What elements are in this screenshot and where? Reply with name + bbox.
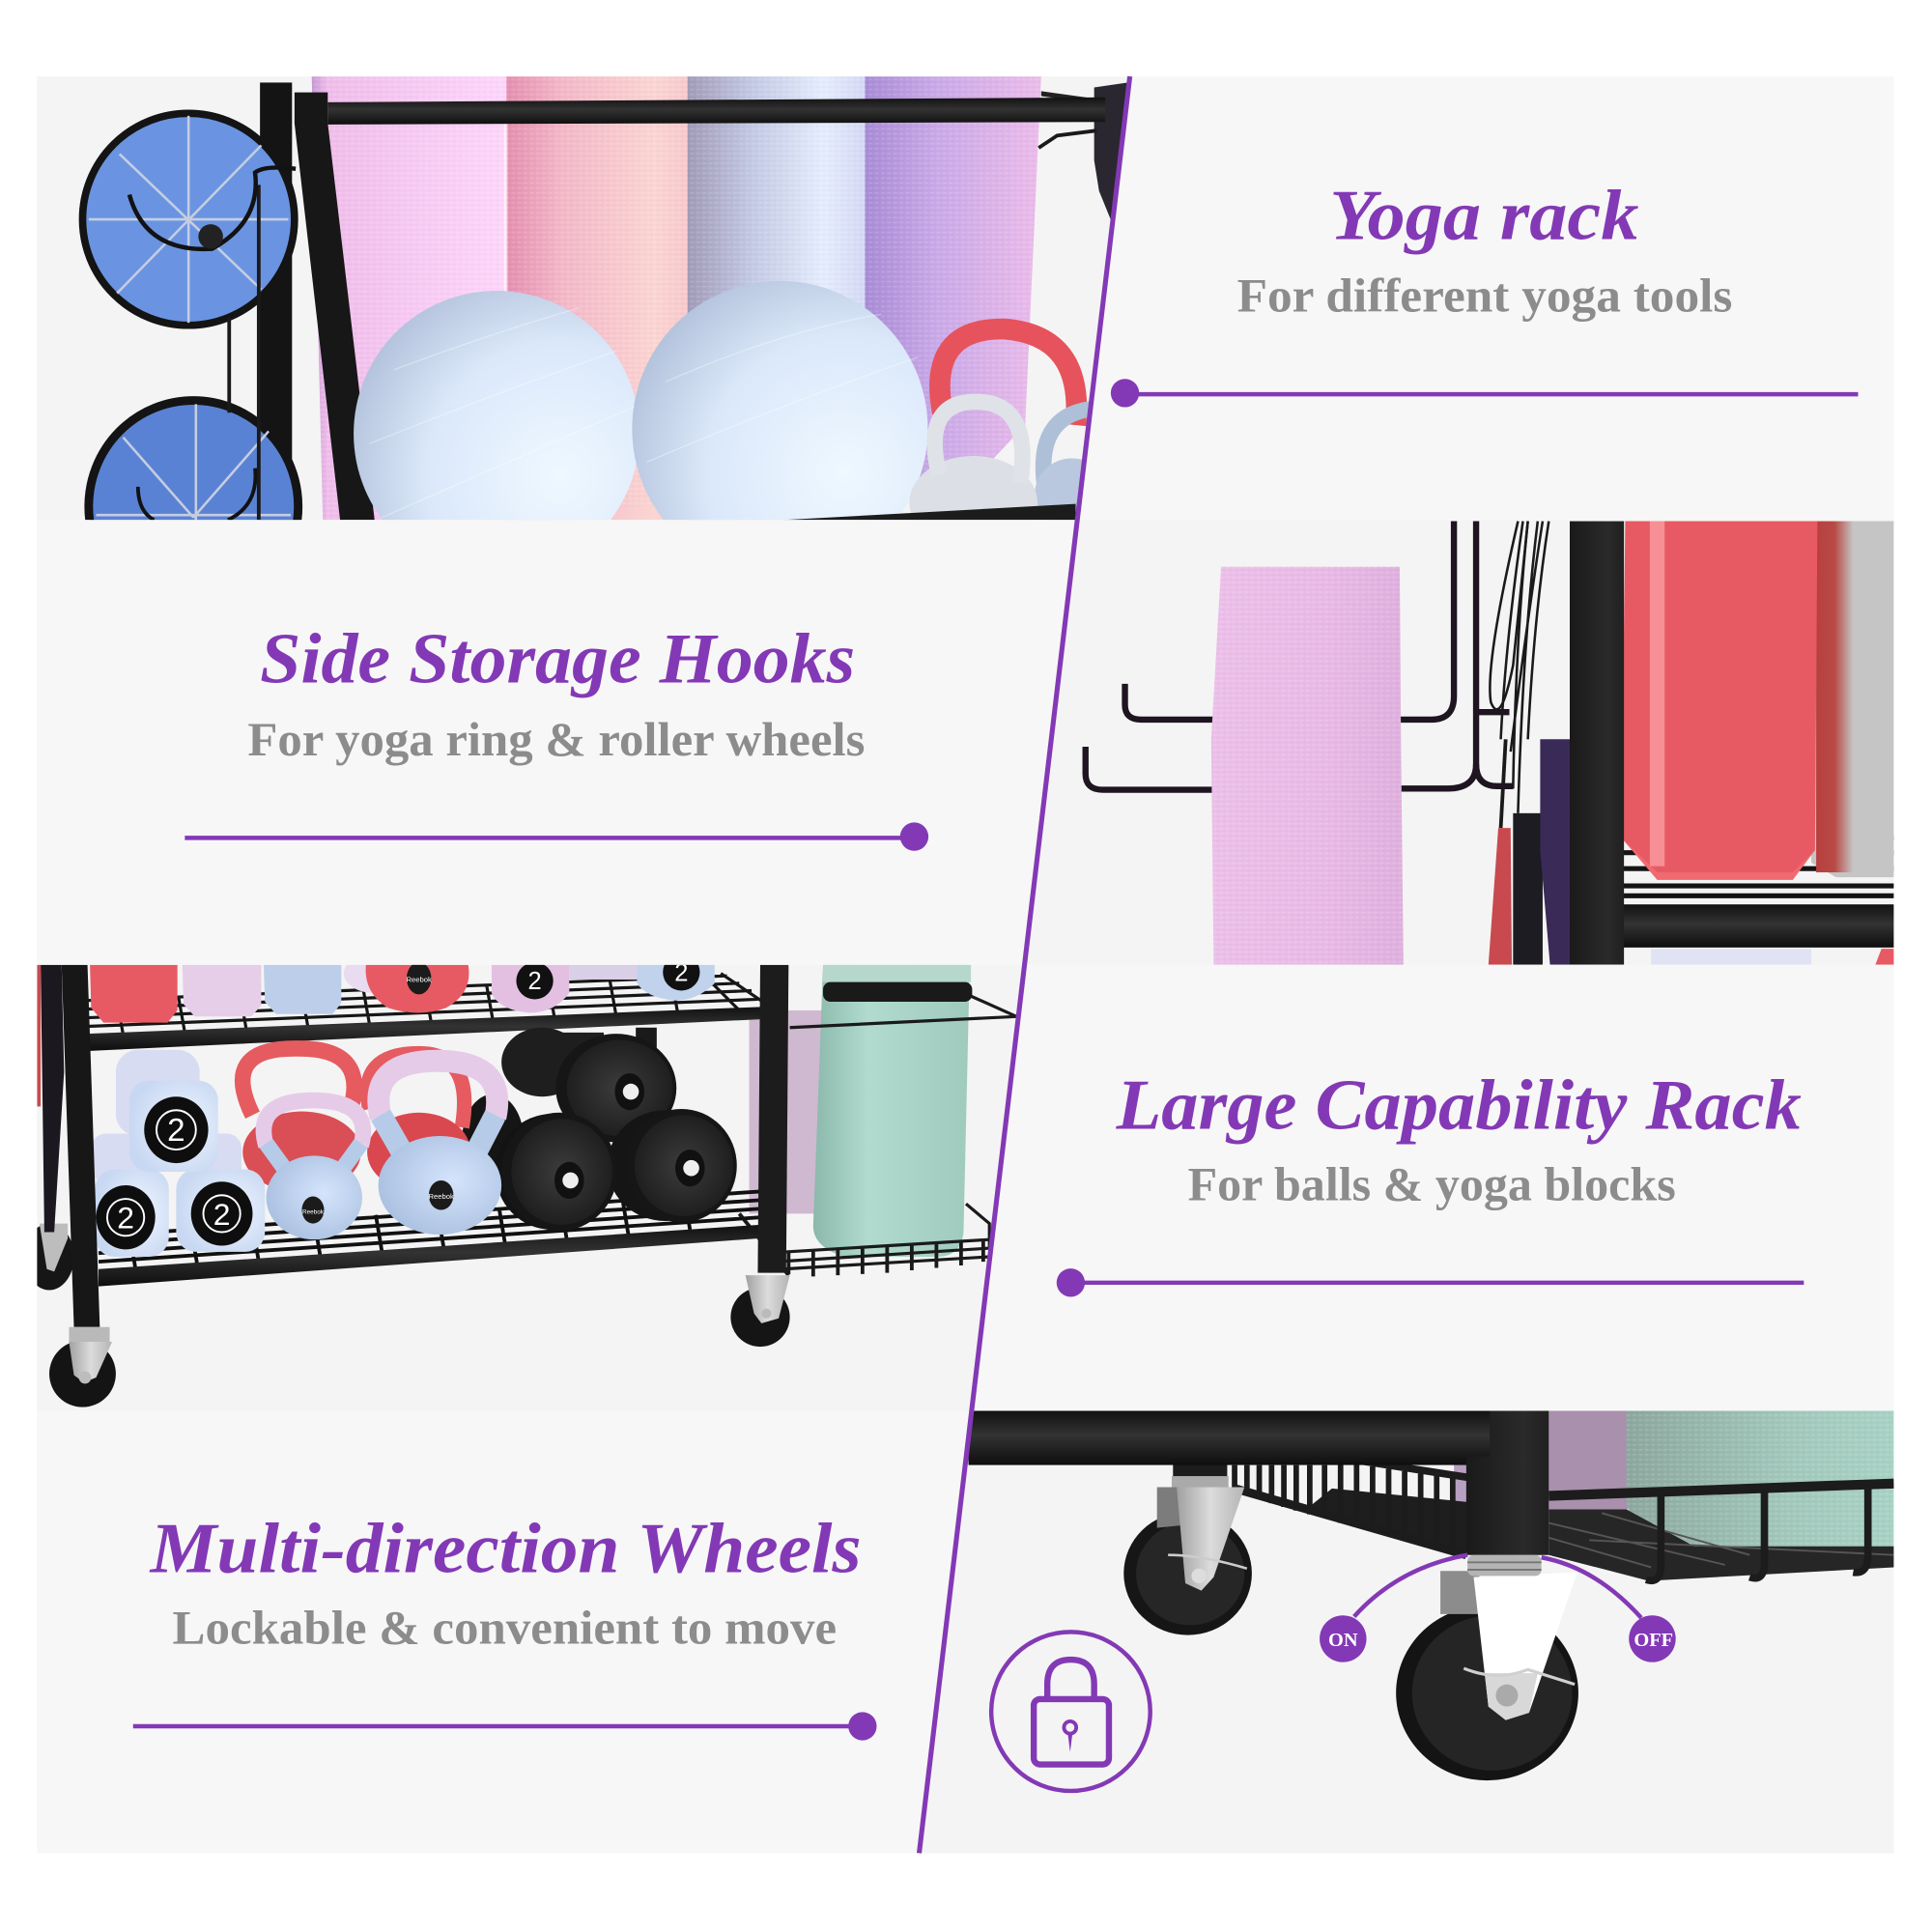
reebok label	[407, 962, 432, 994]
panel: wheels photo	[968, 1410, 1893, 1793]
upright post	[1466, 1410, 1548, 1555]
pointer line: large rack	[1057, 1268, 1804, 1296]
lower rack bar	[783, 504, 1076, 520]
wire basket	[1235, 1457, 1893, 1580]
yoga wheel	[1211, 567, 1404, 965]
mats behind frame	[1454, 1410, 1893, 1550]
text block: side hooks	[185, 620, 928, 851]
back casters	[25, 1224, 790, 1347]
subheading: side hooks: For yoga ring & roller wheels	[247, 713, 865, 766]
side wheels	[79, 110, 303, 520]
exercise balls	[354, 281, 927, 520]
icon: padlock	[991, 1632, 1151, 1791]
hex dumbbells: 2	[213, 1197, 230, 1232]
reebok label: Reebok	[407, 976, 432, 984]
subheading: yoga rack: For different yoga tools	[1237, 270, 1732, 323]
kettlebells: red and pink	[242, 1048, 501, 1239]
heading: wheels: Multi-direction Wheels	[150, 1510, 862, 1589]
kettlebells: red and pink: Reebok	[428, 1192, 454, 1201]
pointer line: yoga rack	[1111, 379, 1858, 408]
text block: wheels	[133, 1510, 877, 1741]
upper shelf bar	[88, 1007, 766, 1051]
crossbar	[969, 1410, 1491, 1465]
upper shelf items: 2	[674, 959, 688, 986]
kettlebells	[910, 319, 1090, 520]
OFF badge: OFF	[1634, 1630, 1673, 1651]
hex dumbbells	[91, 1050, 265, 1257]
heading: large rack: Large Capability Rack	[1116, 1065, 1802, 1145]
front caster	[49, 1327, 116, 1407]
yoga mats	[312, 76, 1041, 520]
lock arcs	[1354, 1555, 1641, 1618]
panel: storage shelves photo	[25, 953, 1035, 1410]
lower shelf wires	[99, 1191, 760, 1269]
back caster	[1123, 1460, 1252, 1635]
mats behind shelf	[750, 965, 972, 1257]
upper shelf items: 2	[527, 968, 542, 995]
upper shelf wires	[88, 974, 766, 1035]
subheading: large rack: For balls & yoga blocks	[1188, 1157, 1676, 1210]
pointer line: side hooks	[185, 822, 928, 851]
pointer line: wheels	[133, 1712, 877, 1741]
side plate	[1540, 739, 1570, 965]
lower items	[1651, 949, 1893, 965]
ON badge	[1320, 1615, 1367, 1662]
resistance bands	[1490, 522, 1548, 828]
dumbbell set: black plates	[462, 1028, 737, 1231]
rack frame	[260, 82, 1127, 520]
hex dumbbells: 2	[167, 1113, 185, 1149]
OFF badge	[1629, 1615, 1676, 1662]
subheading: wheels: Lockable & convenient to move	[173, 1602, 837, 1655]
panel: yoga rack photo	[79, 76, 1126, 520]
front caster	[1396, 1555, 1578, 1780]
kettlebells: red and pink: Reebok	[302, 1208, 325, 1215]
upright post	[1570, 522, 1624, 965]
lower shelf bar	[99, 1225, 760, 1287]
band handles	[1489, 813, 1543, 965]
text block: large rack	[1057, 1065, 1804, 1296]
frame posts	[37, 965, 788, 1327]
ON badge: ON	[1328, 1630, 1358, 1651]
panel: side hooks photo	[1023, 520, 1897, 966]
upper shelf items	[90, 964, 715, 1023]
hook rods	[1086, 522, 1513, 790]
heading: side hooks: Side Storage Hooks	[260, 620, 855, 699]
diagonal divider	[920, 76, 1130, 1853]
yoga blocks	[1622, 522, 1893, 880]
shelf grid	[1619, 838, 1893, 948]
heading: yoga rack: Yoga rack	[1329, 176, 1638, 255]
side basket	[739, 996, 1016, 1276]
hex dumbbells: 2	[117, 1201, 134, 1236]
text block: yoga rack	[1111, 176, 1858, 408]
